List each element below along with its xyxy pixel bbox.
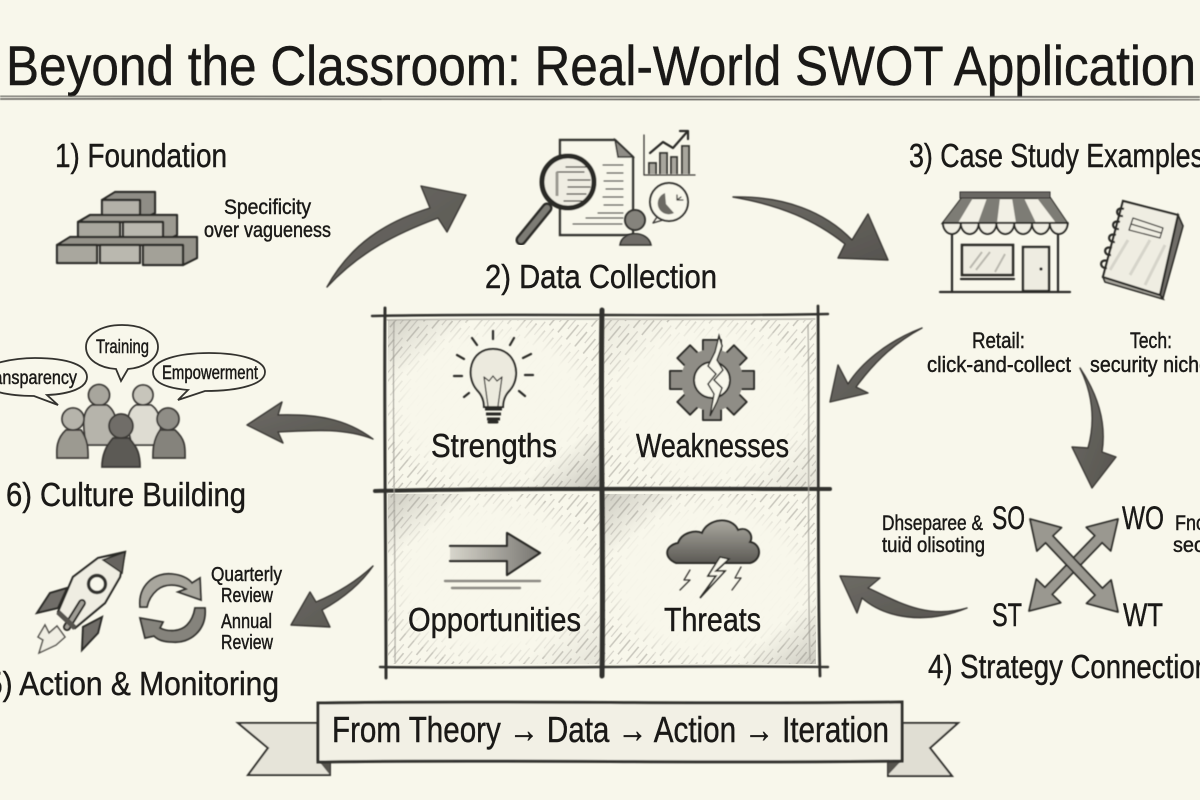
banner text: From Theory → Data → Action → Iteration bbox=[332, 709, 889, 750]
icon: review cycle bbox=[140, 574, 205, 642]
text: specificity over vagueness bbox=[204, 196, 331, 242]
text: reviews: Annual bbox=[221, 611, 272, 633]
icon: person with pie chart bubble bbox=[620, 183, 688, 245]
arrow: case study to swot grid bbox=[830, 328, 922, 402]
banner body bbox=[318, 702, 902, 762]
speech bubble: empowerment: Empowerment bbox=[162, 363, 259, 384]
icon: right arrow bbox=[445, 533, 540, 588]
section 1: foundation bbox=[55, 137, 331, 265]
section 3: case study bbox=[909, 137, 1200, 377]
text: reviews: Review bbox=[221, 585, 273, 607]
speech bubble: empowerment bbox=[153, 353, 265, 400]
heading: data collection: 2) Data Collection bbox=[485, 258, 717, 295]
icon: cracked gear bbox=[670, 336, 754, 420]
arrow: swot grid to action bbox=[291, 566, 373, 627]
text: tech: Tech: bbox=[1130, 328, 1172, 353]
text: disperse and fund: Dhseparee & bbox=[882, 512, 983, 535]
icon: brick stack bbox=[57, 192, 197, 265]
label: so: SO bbox=[992, 500, 1025, 536]
label: wt: WT bbox=[1123, 597, 1163, 633]
text: reviews: Review bbox=[221, 632, 273, 654]
text: reviews bbox=[211, 564, 282, 654]
section 2: data collection bbox=[485, 131, 717, 295]
arrow: data collection to case study bbox=[733, 197, 888, 260]
icon: document and magnifying glass bbox=[521, 140, 633, 240]
text: specificity over vagueness: over vagueness bbox=[204, 219, 331, 242]
arrow: swot grid to culture bbox=[247, 402, 373, 443]
speech bubble: training bbox=[86, 325, 158, 381]
text: reviews: Quarterly bbox=[211, 564, 282, 586]
label: strengths: Strengths bbox=[431, 427, 557, 464]
icon: crossing arrows bbox=[1029, 519, 1118, 612]
text: retail: Retail: bbox=[972, 328, 1025, 353]
swot grid bbox=[372, 306, 830, 678]
arrow: foundation to data collection bbox=[327, 186, 466, 287]
text: retail bbox=[927, 328, 1071, 377]
text: disperse and fund: tuiḋ olisoting bbox=[882, 534, 985, 557]
arrow: case study to strategy bbox=[1072, 368, 1116, 488]
label: wo: WO bbox=[1122, 500, 1164, 536]
heading: foundation: 1) Foundation bbox=[55, 137, 227, 174]
label: threats: Threats bbox=[664, 601, 761, 638]
icon: light bulb bbox=[454, 331, 533, 422]
text: right cut off note bbox=[1173, 512, 1200, 557]
grid shading bbox=[381, 318, 822, 666]
icon: people group bbox=[57, 384, 185, 467]
icon: notebook bbox=[1101, 201, 1183, 299]
icon: rocket bbox=[37, 552, 125, 653]
text: tech bbox=[1090, 328, 1200, 377]
section 4: strategy connection bbox=[882, 500, 1200, 685]
text: disperse and fund bbox=[882, 512, 985, 557]
icon: bar chart bbox=[644, 131, 695, 175]
icon: storm cloud bbox=[667, 521, 759, 598]
arrow: strategy to swot grid bbox=[840, 576, 967, 618]
grid lines bbox=[372, 306, 830, 678]
label: opportunities: Opportunities bbox=[408, 601, 581, 638]
section 6: culture building bbox=[0, 325, 265, 513]
section 5: action and monitoring bbox=[0, 552, 282, 702]
label: st: ST bbox=[992, 597, 1022, 633]
banner tails bbox=[238, 723, 958, 776]
text: retail: click-and-collect bbox=[927, 352, 1071, 377]
banner bbox=[238, 702, 958, 776]
label: weaknesses: Weaknesses bbox=[636, 427, 789, 464]
icon: shop bbox=[940, 192, 1070, 292]
heading: culture building: 6) Culture Building bbox=[6, 476, 246, 513]
speech bubble: training: Training bbox=[96, 337, 149, 358]
text: specificity over vagueness: Specificity bbox=[224, 196, 311, 219]
speech bubble: transparency bbox=[0, 358, 87, 405]
